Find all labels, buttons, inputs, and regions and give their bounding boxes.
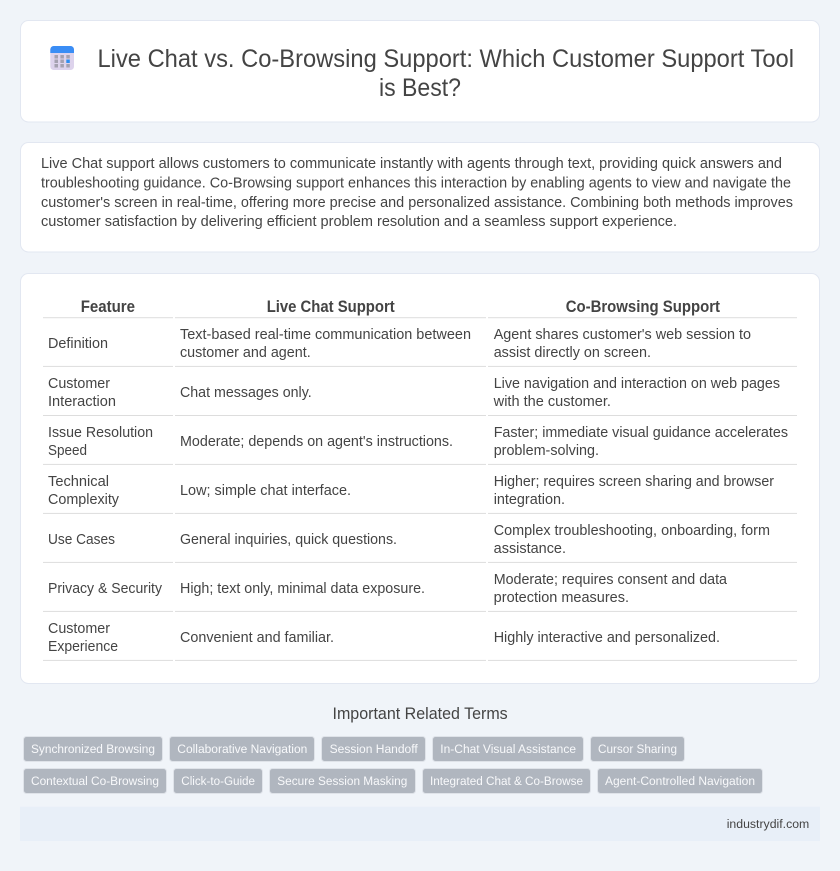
table row: privacy and security: High; text only, minimal data exposure. [180,581,425,597]
heading: title: Live Chat vs. Co-Browsing Support: Which Customer Support Tool [98,46,794,73]
tag: Synchronized Browsing [24,736,162,762]
footer source text: industrydif.com [727,817,809,831]
table row: privacy and security: protection measures. [494,590,629,606]
table row: customer interaction: Chat messages only. [180,385,312,401]
table row: issue resolution speed: Faster; immediate visual guidance accelerates [494,425,788,441]
tag: Synchronized Browsing: Synchronized Browsing [31,742,155,756]
tag: Secure Session Masking: Secure Session Masking [277,774,407,788]
table row: privacy and security [43,572,797,612]
tag: Integrated Chat & Co-Browse [422,768,590,794]
panel: introduction [20,142,820,252]
tag: Collaborative Navigation: Collaborative Navigation [177,742,307,756]
table row: technical complexity: integration. [494,492,565,508]
tag: Cursor Sharing [590,736,684,762]
table row: issue resolution speed: problem-solving. [494,443,599,459]
tag: Agent-Controlled Navigation: Agent-Controlled Navigation [605,774,755,788]
table row: customer interaction: Live navigation and interaction on web pages [494,376,780,392]
table row: definition [43,327,797,367]
table row: customer interaction: with the customer. [493,394,611,410]
tag: Contextual Co-Browsing: Contextual Co-Browsing [31,774,159,788]
table row: definition: Text-based real-time communication between [180,327,471,343]
icon: calendar grid [50,46,74,70]
table row: definition: customer and agent. [180,345,311,361]
table row: use cases: assistance. [494,541,566,557]
table row: customer interaction: Customer [48,376,110,392]
table row: definition: assist directly on screen. [494,345,651,361]
table row: customer experience: Convenient and familiar. [180,630,334,646]
table row: use cases: Complex troubleshooting, onboarding, form [494,523,770,539]
table row: issue resolution speed: Moderate; depends on agent's instructions. [180,434,453,450]
tag: Cursor Sharing: Cursor Sharing [598,742,677,756]
table row: technical complexity: Technical [48,474,109,490]
text block: introduction paragraph: customer satisfaction by delivering efficient problem resolution and a seamless support experience. [41,214,677,230]
table row: technical complexity: Low; simple chat interface. [180,483,351,499]
table row: definition: Definition [48,336,108,352]
tag: Click-to-Guide: Click-to-Guide [181,774,255,788]
table row: customer experience: Customer [48,621,110,637]
panel: comparison table [20,274,820,684]
table row: customer experience: Experience [48,639,118,655]
table row: privacy and security: Moderate; requires consent and data [494,572,727,588]
table row: technical complexity: Higher; requires screen sharing and browser [494,474,774,490]
heading: title: is Best? [379,75,461,102]
heading: important related terms: Important Related Terms [332,705,508,723]
tag: Agent-Controlled Navigation [598,768,762,794]
text block: introduction paragraph: troubleshooting guidance. Co-Browsing support enhances this interaction by enabling agents to view and navigate the [41,176,791,192]
text block: introduction paragraph: customer's screen in real-time, offering more precise and personalized assistance. Combining both methods improves [41,195,793,211]
tag list: related terms [24,736,762,794]
table row: customer experience: Highly interactive and personalized. [494,630,720,646]
tag: Contextual Co-Browsing [24,768,166,794]
tag: In-Chat Visual Assistance [432,736,584,762]
table row: customer interaction: Interaction [48,394,116,410]
tag: Integrated Chat & Co-Browse: Integrated Chat & Co-Browse [430,774,583,788]
table row: technical complexity [43,474,797,514]
table header row: Co-Browsing Support [566,298,721,316]
table row: use cases: Use Cases [48,532,115,548]
table row: issue resolution speed: Speed [48,443,87,459]
tag: Secure Session Masking [270,768,416,794]
table header row: Live Chat Support [267,298,395,316]
table header row [43,298,797,318]
panel: title header [20,20,820,122]
text block: introduction paragraph [41,156,793,230]
table row: definition: Agent shares customer's web session to [494,327,751,343]
tag: Collaborative Navigation [170,736,314,762]
footer bar [20,807,820,841]
table row: customer interaction [43,376,797,416]
text block: introduction paragraph: Live Chat support allows customers to communicate instantly with agents through text, providing quick answers and [41,156,782,172]
table header row: Feature [81,298,135,316]
table row: use cases [43,523,797,563]
tag: Session Handoff: Session Handoff [330,742,418,756]
tag: Session Handoff [322,736,426,762]
table row: privacy and security: Privacy & Security [48,581,163,597]
table row: issue resolution speed [43,425,797,465]
table row: customer experience [43,621,797,661]
heading: title [98,46,794,102]
table row: technical complexity: Complexity [48,492,120,508]
table row: issue resolution speed: Issue Resolution [48,425,153,441]
tag: Click-to-Guide [174,768,262,794]
tag: In-Chat Visual Assistance: In-Chat Visual Assistance [440,742,576,756]
table row: use cases: General inquiries, quick questions. [180,532,397,548]
